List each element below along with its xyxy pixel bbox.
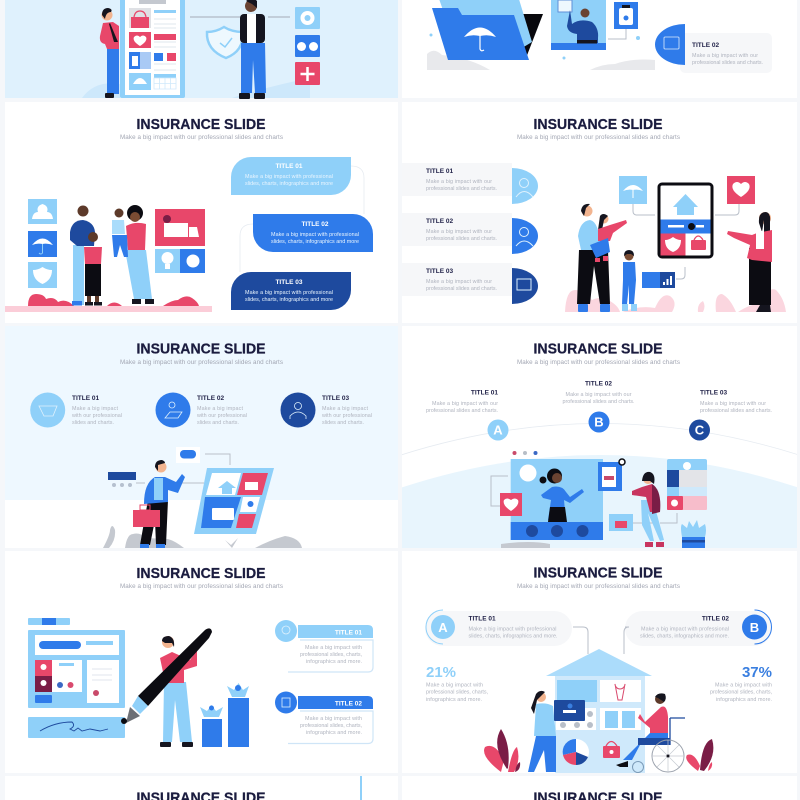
callout A: A [493, 422, 503, 438]
illustration: potted plant [681, 520, 706, 548]
list item 02 [402, 213, 538, 254]
card: title 02 [655, 24, 772, 73]
callout A: Make a big impact with professional [468, 626, 556, 632]
card: title 01: Make a big impact with [305, 645, 362, 651]
title: INSURANCE SLIDE [136, 340, 266, 358]
illustration: right plant [686, 739, 713, 771]
list item 03: professional slides and charts. [426, 286, 497, 292]
icon: lock tile [609, 514, 633, 531]
panel: signature slide, row four left [5, 551, 398, 773]
item 01: TITLE 01 [72, 395, 99, 402]
subtitle: Make a big impact with our professional slides and charts [517, 134, 680, 141]
card: title 02: TITLE 02 [692, 42, 719, 49]
icon: umbrella tile [619, 176, 647, 204]
list item 01 [402, 163, 538, 204]
illustration: form window [28, 618, 125, 708]
item 02: Make a big impact [197, 406, 244, 412]
icon tiles: bulb and check [155, 249, 205, 273]
list item 02: TITLE 02 [426, 218, 453, 225]
card: title 01: slides, charts, infographics and more [245, 181, 333, 187]
icon: rating card [108, 472, 136, 487]
subtitle: Make a big impact with our professional slides and charts [517, 359, 680, 366]
icon: bottle tile [614, 2, 638, 29]
illustration: man with briefcase [133, 460, 185, 548]
item 03: slides and charts. [322, 420, 364, 426]
icon: dots tile [295, 35, 320, 57]
item 01 [30, 392, 122, 428]
illustration: family [70, 205, 154, 306]
panel: clipboard slide, top left [5, 0, 398, 99]
illustration: man in wheelchair [616, 693, 685, 772]
illustration: shield [207, 27, 243, 58]
card: title 01 [275, 620, 373, 672]
card: title 02: professional slides and charts. [692, 60, 763, 66]
illustration: grey shrubs [103, 526, 302, 548]
illustration: big pen [121, 628, 212, 724]
item 02: with our professional [196, 413, 247, 419]
stat: 37%: infographics and more. [716, 697, 772, 703]
list item 01: TITLE 01 [426, 168, 453, 175]
callout B: B [750, 620, 759, 635]
chart: pie [563, 739, 589, 765]
item 01: slides and charts. [72, 420, 114, 426]
icon: user tile [295, 7, 320, 29]
item 02: slides and charts. [197, 420, 239, 426]
stat: 37%: 37% [742, 664, 772, 681]
title: INSURANCE SLIDE [136, 565, 266, 582]
card: title 01: infographics and more. [306, 659, 362, 665]
stat: 37%: professional slides, charts, [710, 690, 772, 696]
illustration: woman in red jacket [727, 212, 772, 312]
illustration: tablet with tiles [194, 468, 274, 534]
callout B [562, 380, 634, 432]
illustration: video call screen [501, 451, 603, 548]
illustration: man in red jacket [100, 8, 119, 98]
stat: 21% [426, 664, 488, 703]
callout A: slides, charts, infographics and more. [468, 634, 558, 640]
title: INSURANCE SLIDE [534, 116, 662, 133]
stat: 37%: Make a big impact with [715, 682, 772, 688]
illustration: house [546, 649, 652, 773]
panel: tablet slide, row three left [5, 326, 398, 548]
callout C [689, 390, 772, 440]
title: INSURANCE SLIDE [534, 564, 662, 582]
item 01: with our professional [71, 413, 122, 419]
illustration: father and daughter [577, 204, 627, 312]
card: title 02: slides, charts, infographics and more [271, 239, 359, 245]
callout A: A [438, 620, 448, 635]
card: title 03: slides, charts, infographics and more [245, 297, 333, 303]
callout A: TITLE 01 [468, 616, 496, 622]
icon: plus tile [295, 62, 320, 85]
card: title 02 [275, 692, 373, 744]
card: title 02: infographics and more. [306, 730, 362, 736]
card: title 02: Make a big impact with professional [271, 232, 359, 238]
stat: 21%: professional slides, charts, [426, 690, 488, 696]
callout B: B [594, 414, 604, 430]
list item 02: professional slides and charts. [426, 236, 497, 242]
subtitle: Make a big impact with our professional slides and charts [120, 583, 283, 590]
callout B: TITLE 02 [702, 616, 729, 622]
callout B: professional slides and charts. [562, 399, 634, 405]
list item 02: Make a big impact with our [426, 229, 492, 235]
panel: cut-off slide, bottom left [5, 776, 398, 800]
subtitle: Make a big impact with our professional slides and charts [120, 134, 283, 141]
callout C: Make a big impact with our [700, 401, 766, 407]
illustration: left plant [484, 729, 520, 772]
callout B: Make a big impact with professional [641, 626, 729, 632]
callout A [425, 610, 572, 646]
card: title 02: TITLE 02 [301, 221, 329, 228]
subtitle: Make a big impact with our professional slides and charts [120, 359, 283, 366]
illustration: woman [632, 472, 664, 547]
icon: heart tile [727, 176, 755, 204]
icon: heart tile [500, 493, 522, 516]
illustration: man holding pen [160, 636, 197, 747]
illustration: screen with man [551, 0, 606, 50]
panel: folder slide, top right [402, 0, 797, 98]
illustration: nurse with tablet [528, 691, 585, 772]
panel: house slide, row four right [402, 551, 797, 773]
illustration: folder with umbrella [432, 0, 543, 60]
list item 03 [402, 263, 538, 304]
stat: 37% [710, 664, 772, 703]
item 03 [280, 392, 372, 428]
card: title 02: Make a big impact with [305, 716, 362, 722]
icon: globe and chart tile [642, 272, 675, 288]
list item 03: Make a big impact with our [426, 279, 492, 285]
callout A [426, 390, 508, 440]
panel: video call slide, row three right [380, 326, 800, 548]
illustration: pink shrubs [565, 289, 786, 312]
subtitle: Make a big impact with our professional slides and charts [517, 583, 680, 590]
callout A: TITLE 01 [471, 390, 498, 396]
callout B: TITLE 02 [585, 380, 612, 388]
list item 03: TITLE 03 [426, 268, 453, 275]
item 03: TITLE 03 [322, 395, 349, 402]
card: title 03: TITLE 03 [275, 279, 303, 286]
callout A: Make a big impact with our [432, 401, 498, 407]
illustration: red bushes and ground [5, 294, 212, 312]
item 03: with our professional [321, 413, 372, 419]
chart: two bars with plants [200, 683, 249, 747]
illustration: side panel [667, 459, 707, 510]
illustration: small girl [622, 250, 637, 311]
item 03: Make a big impact [322, 406, 368, 412]
card: title 01: professional slides, charts, [300, 652, 362, 658]
item 01: Make a big impact [72, 406, 118, 412]
card: title 02: Make a big impact with our [692, 53, 758, 59]
item 02 [156, 392, 247, 428]
card: title 03 [231, 272, 351, 310]
illustration: tablet with insurance icons [659, 184, 712, 257]
callout C: C [695, 422, 705, 438]
stat: 21%: Make a big impact with [426, 682, 483, 688]
icon: blue pill [176, 447, 200, 463]
panel: cut-off slide, bottom right [402, 776, 797, 800]
icon: document tile [598, 459, 625, 491]
callout C: TITLE 03 [700, 390, 727, 396]
panel: family slide, middle left [5, 102, 398, 323]
item 02: TITLE 02 [197, 395, 224, 402]
background dome [380, 455, 800, 548]
illustration: man in black jacket [239, 0, 266, 99]
title: INSURANCE SLIDE [534, 340, 662, 358]
list item 01: Make a big impact with our [426, 179, 492, 185]
illustration: clouds [427, 51, 655, 70]
icon: first aid bag [603, 742, 620, 758]
icon column: family, umbrella, shield [28, 199, 57, 288]
stat: 21%: infographics and more. [426, 697, 482, 703]
card: title 01: Make a big impact with professional [245, 174, 333, 180]
callout B [625, 610, 772, 646]
stat: 21%: 21% [426, 664, 456, 681]
callout C: professional slides and charts. [700, 408, 772, 414]
card: title 02: TITLE 02 [335, 700, 362, 708]
list item 01: professional slides and charts. [426, 186, 497, 192]
card: title 03: Make a big impact with professional [245, 290, 333, 296]
callout B: Make a big impact with our [566, 392, 632, 398]
illustration: signature box [28, 717, 125, 738]
card: title 02 [253, 214, 373, 252]
card: title 01 [231, 157, 351, 195]
callout B: slides, charts, infographics and more. [640, 634, 729, 640]
callout A: professional slides and charts. [426, 408, 498, 414]
title: INSURANCE SLIDE [136, 116, 266, 133]
card: title 02: professional slides, charts, [300, 723, 362, 729]
card: title 01: TITLE 01 [335, 630, 362, 636]
illustration: delivery truck tile [155, 209, 205, 246]
panel: phone family slide, middle right [402, 102, 797, 323]
illustration: clipboard [120, 0, 185, 98]
card: title 01: TITLE 01 [275, 163, 303, 170]
